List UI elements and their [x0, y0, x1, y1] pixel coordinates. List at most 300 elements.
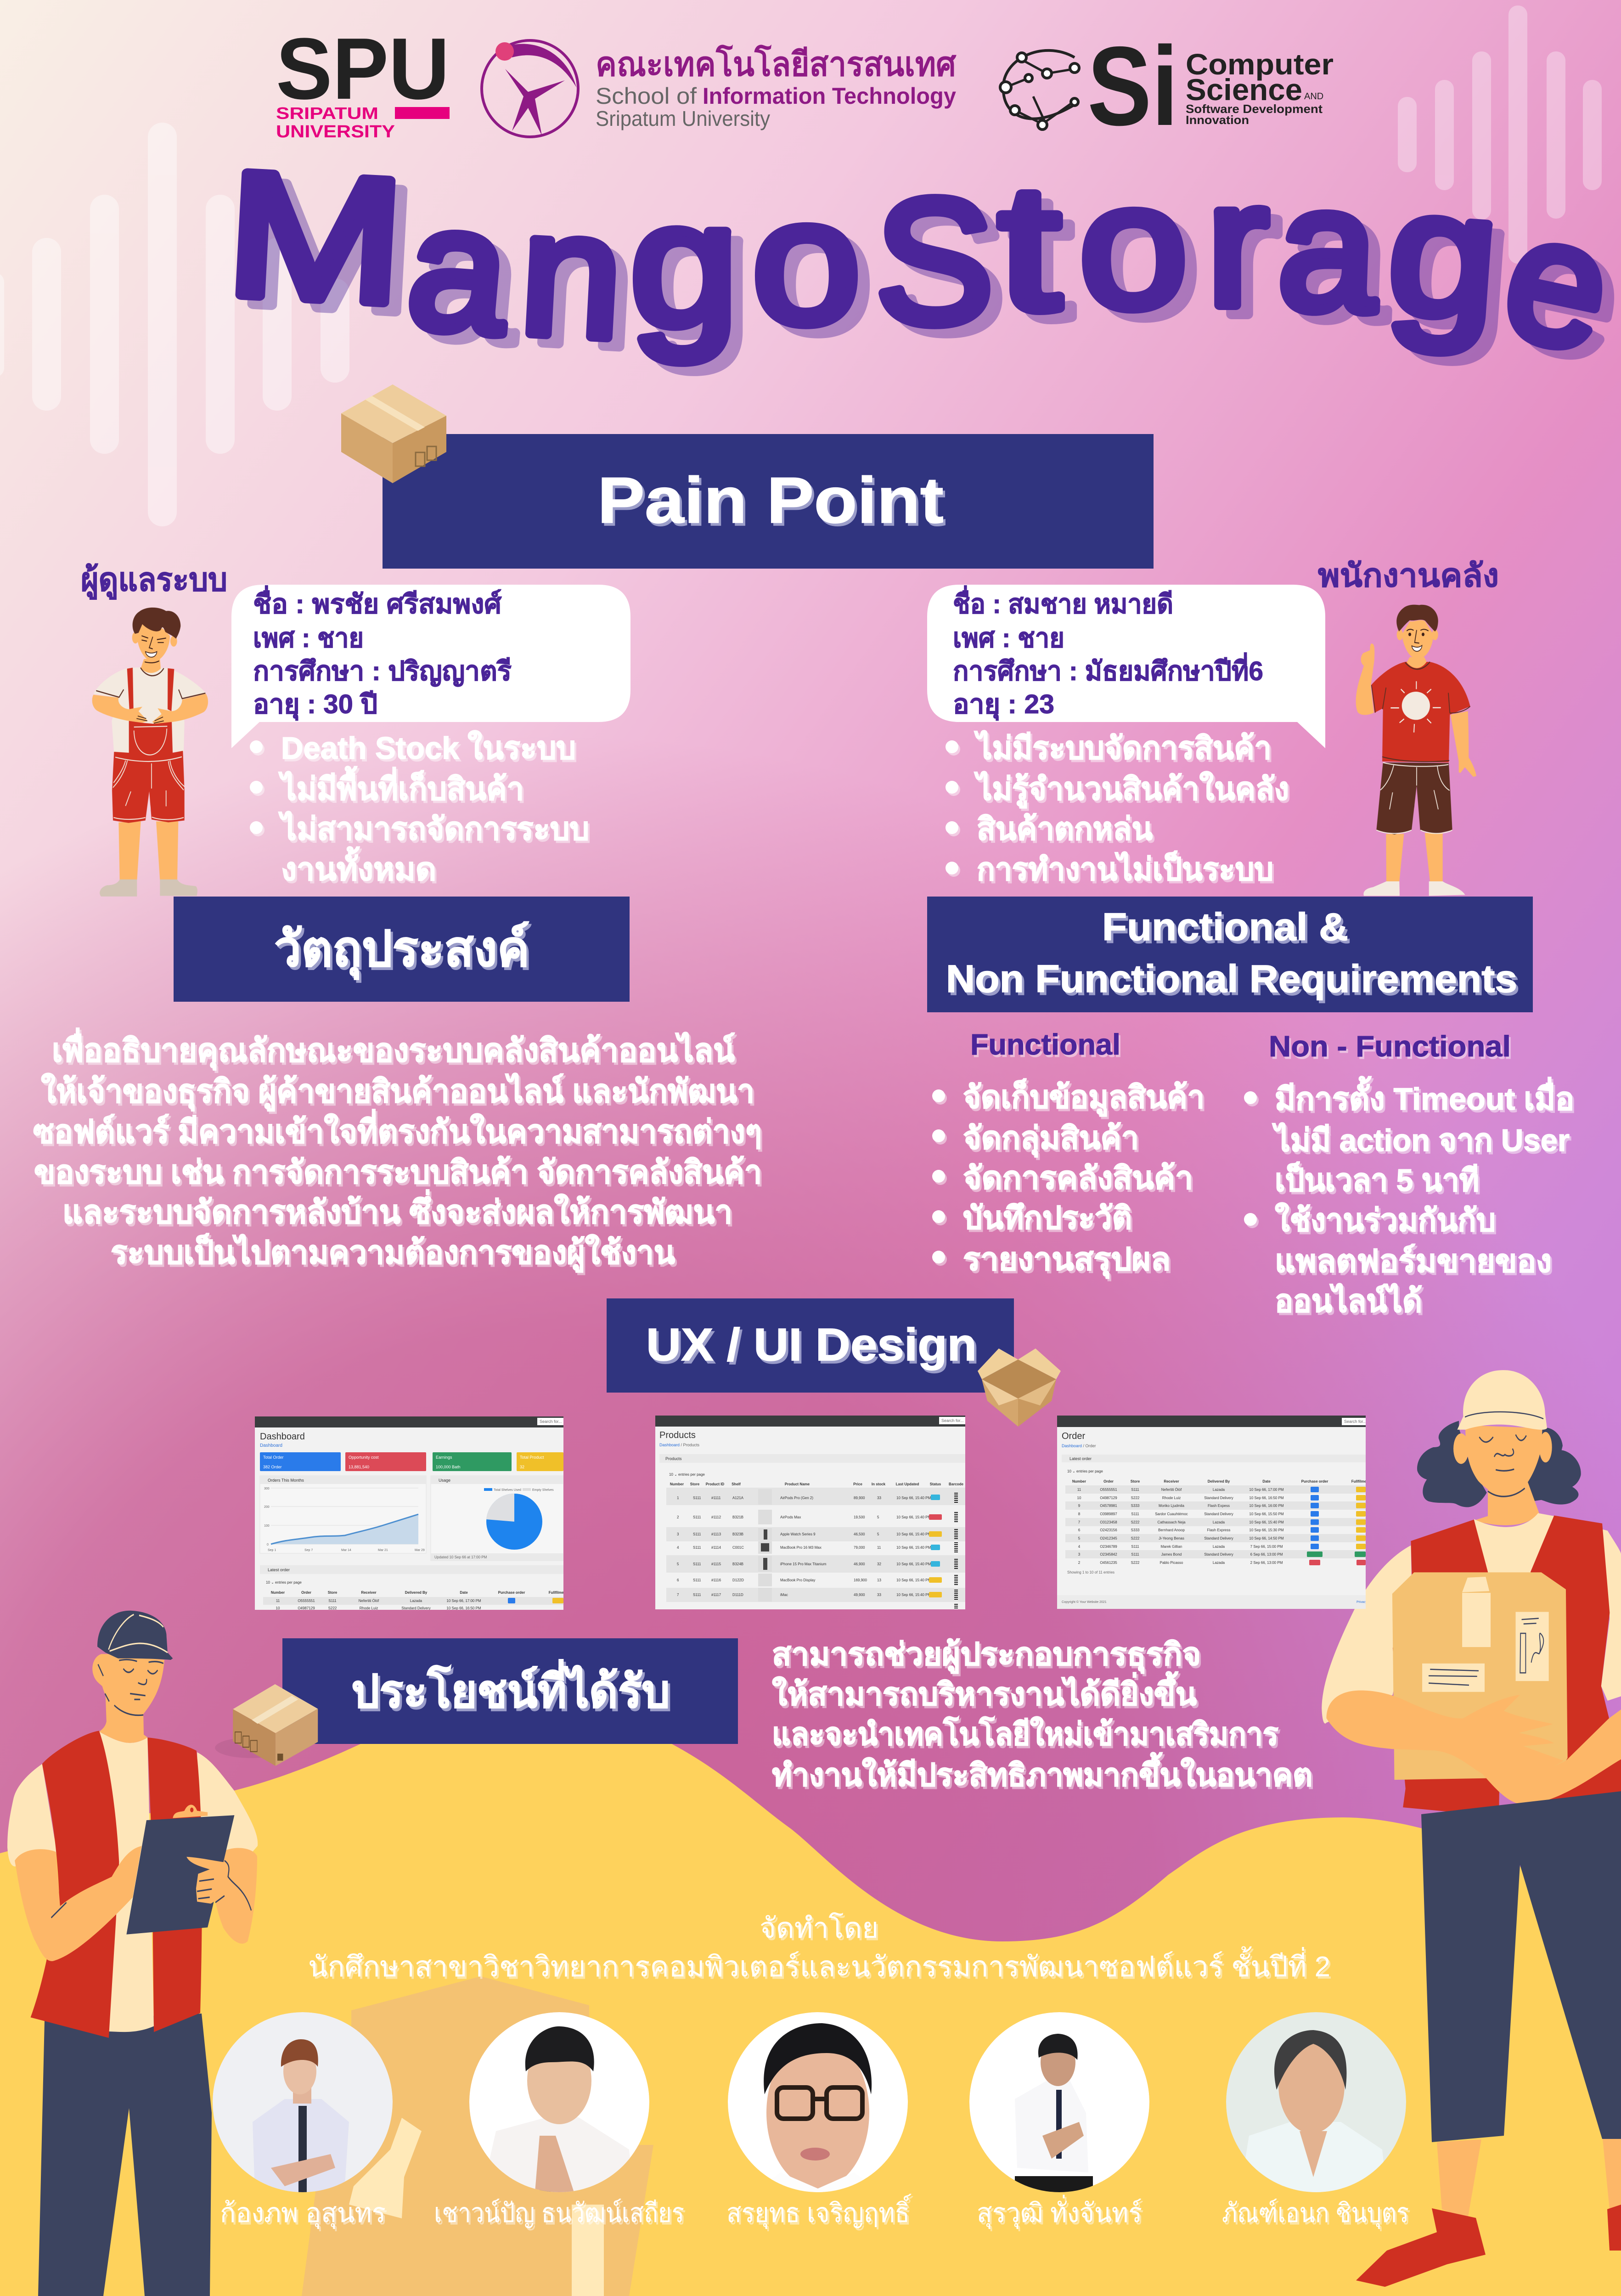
label: system admin: ผู้ดูแลระบบ — [81, 562, 227, 600]
product table: B324B — [732, 1562, 743, 1566]
title: MangoStorage: a — [401, 166, 518, 372]
speech bubble: admin persona: เพศ : ชาย — [253, 623, 364, 653]
speech bubble: admin persona — [231, 585, 630, 748]
order table: 10 Sep 66, 15:30 PM — [1249, 1528, 1284, 1532]
product table: A121A — [732, 1496, 744, 1500]
screenshot: dashboard — [255, 1416, 568, 1610]
product table: 3 — [677, 1532, 679, 1536]
order table: Moriko Ljudmila — [1159, 1504, 1185, 1508]
student names: ก้องภพ อุสุนทร — [220, 2198, 386, 2229]
product table: C001C — [732, 1546, 744, 1550]
product table: S111 — [693, 1532, 701, 1536]
functional requirements list: บันทึกประวัติ — [963, 1201, 1132, 1235]
student names: สุรวุฒิ ทั่งจันทร์ — [977, 2194, 1142, 2229]
order table: 2 — [1078, 1561, 1081, 1565]
product table: 79,000 — [854, 1546, 865, 1550]
order table: 6 — [1078, 1528, 1081, 1532]
logo: SPU: SRIPATUM — [276, 104, 378, 123]
latest orders panel: Store — [328, 1591, 338, 1595]
latest orders panel: Receiver — [361, 1591, 377, 1595]
non-functional requirements list: ใช้งานร่วมกันกับ — [1275, 1202, 1496, 1238]
screenshot: products — [655, 1416, 965, 1609]
order table: O4561235 — [1100, 1561, 1117, 1565]
line chart panel: 0 — [267, 1543, 269, 1546]
order table: James Bond — [1161, 1552, 1182, 1557]
product table: 169,900 — [854, 1578, 867, 1582]
product table: Store — [690, 1482, 700, 1486]
screenshot: orders: 10 ⌄ entries per page — [1067, 1469, 1103, 1473]
logo: CSI: Computer — [1186, 48, 1334, 81]
order table: Fullfilment — [1351, 1479, 1370, 1484]
product table: B321B — [732, 1515, 743, 1519]
benefits paragraph: สามารถช่วยผู้ประกอบการธุรกิจ — [772, 1637, 1201, 1674]
latest orders panel: Latest order — [268, 1568, 290, 1572]
product table: 19,500 — [854, 1515, 865, 1519]
product table: #1112 — [711, 1515, 721, 1519]
product table: Number — [670, 1482, 684, 1486]
order table: O4987129 — [1100, 1496, 1117, 1500]
latest orders panel: Order — [301, 1591, 311, 1595]
product table: 10 Sep 66, 15:40 PM — [896, 1593, 931, 1597]
objectives paragraph — [33, 1027, 762, 1273]
product table: #1114 — [711, 1546, 721, 1550]
line chart panel: 100 — [264, 1524, 270, 1528]
functional requirements list: รายงานสรุปผล — [963, 1242, 1171, 1279]
logo: CSI: Innovation — [1186, 113, 1249, 127]
summary cards: 13,881,540 — [349, 1465, 369, 1469]
product table: #1111 — [711, 1496, 721, 1500]
order table: Standard Delivery — [1204, 1552, 1233, 1557]
benefits paragraph — [772, 1637, 1312, 1793]
decorative sound-wave bars, left — [0, 123, 349, 526]
photo: student 5 — [1226, 2012, 1406, 2192]
speech bubble: warehouse persona: การศึกษา : มัธยมศึกษาปีที่6 — [953, 652, 1263, 686]
functional requirements list — [932, 1078, 1204, 1279]
line chart panel: Sep 1 — [268, 1549, 276, 1552]
order table: S111 — [1131, 1545, 1139, 1549]
pie chart panel — [431, 1476, 563, 1561]
order table: Purchase order — [1301, 1479, 1328, 1484]
order table: O2346789 — [1100, 1545, 1117, 1549]
speech bubble: warehouse persona — [927, 585, 1325, 748]
speech bubble: admin persona: อายุ : 30 ปี — [253, 689, 377, 721]
product table: D122D — [732, 1578, 744, 1582]
pain points list: admin: Death Stock ในระบบ — [281, 730, 576, 766]
product table: AirPods Max — [780, 1515, 801, 1519]
product table: 89,900 — [854, 1496, 865, 1500]
product table: Price — [853, 1482, 862, 1486]
pain points list: warehouse: การทำงานไม่เป็นระบบ — [977, 851, 1273, 887]
product table: 33 — [877, 1593, 881, 1597]
order table: S333 — [1131, 1528, 1140, 1532]
photo: student 1 — [213, 2012, 393, 2193]
line chart panel: Sep 7 — [304, 1549, 313, 1552]
logo: SPU: SPU — [276, 20, 450, 118]
icon: closed box above Pain Point — [341, 384, 446, 483]
order table: Showing 1 to 10 of 11 entries — [1067, 1570, 1114, 1574]
product table: AirPods Pro (Gen 2) — [780, 1496, 813, 1500]
pain points list: admin: ไม่มีพื้นที่เก็บสินค้า — [278, 766, 524, 807]
order table: O3989897 — [1100, 1512, 1117, 1516]
order table: O2345842 — [1100, 1552, 1117, 1557]
non-functional requirements list: แพลตฟอร์มขายของ — [1275, 1244, 1552, 1279]
label: warehouse staff: พนักงานคลัง — [1318, 558, 1499, 593]
product table: 46,500 — [854, 1532, 865, 1536]
order table: O4578981 — [1100, 1504, 1117, 1508]
order table: Receiver — [1164, 1479, 1179, 1484]
product table: S111 — [693, 1515, 701, 1519]
speech bubble: admin persona: ชื่อ : พรชัย ศรีสมพงศ์ — [253, 585, 502, 619]
summary cards: 32 — [520, 1465, 524, 1469]
screenshot: orders: Dashboard / Order — [1062, 1444, 1096, 1448]
speech bubble: warehouse persona: เพศ : ชาย — [953, 623, 1064, 653]
summary cards — [260, 1452, 563, 1471]
logo: CSI: AND — [1304, 91, 1323, 102]
latest orders panel: O5555551 — [298, 1599, 315, 1603]
speech bubble: warehouse persona: ชื่อ : สมชาย หมายดี — [953, 585, 1173, 619]
product table: #1115 — [711, 1562, 721, 1566]
product table: MacBook Pro 16 M3 Max — [780, 1546, 822, 1550]
objectives paragraph: ของระบบ เช่น การจัดการระบบสินค้า จัดการคลังสินค้า — [34, 1154, 762, 1190]
order table: 10 Sep 66, 14:50 PM — [1249, 1536, 1284, 1540]
title: MangoStorage: o — [752, 163, 861, 360]
icon: open box beside UX / UI Design — [978, 1348, 1061, 1427]
product table: Last Updated — [896, 1482, 919, 1486]
title: MangoStorage: n — [516, 173, 627, 375]
order table: Sardor Cuauhtémoc — [1155, 1512, 1188, 1516]
photo: student 2 — [469, 2012, 649, 2195]
non-functional requirements list: ไม่มี action จาก User — [1272, 1122, 1570, 1158]
summary cards: Total Order — [263, 1455, 284, 1460]
screenshot: orders — [1057, 1416, 1370, 1609]
order table: O2423156 — [1100, 1528, 1117, 1532]
pie chart panel: Total Shelves Used — [494, 1489, 521, 1492]
product table: S111 — [693, 1546, 701, 1550]
screenshot: orders: Search for... — [1344, 1419, 1367, 1424]
line chart panel: 300 — [264, 1487, 270, 1490]
order table: Store — [1131, 1479, 1140, 1484]
line chart panel: Orders This Months — [268, 1478, 304, 1483]
line chart panel: Mar 29 — [415, 1549, 425, 1552]
credit: made by: นักศึกษาสาขาวิชาวิทยาการคอมพิวเตอร์และนวัตกรรมการพัฒนาซอฟต์แวร์ ชั้นปีที่ 2 — [308, 1946, 1330, 1983]
title: MangoStorage — [222, 135, 1621, 389]
latest orders panel: Delivered By — [405, 1591, 428, 1595]
order table: S222 — [1131, 1561, 1140, 1565]
credit: made by: จัดทำโดย — [760, 1912, 878, 1944]
order table: Lazada — [1213, 1488, 1225, 1492]
product table: #1116 — [711, 1578, 721, 1582]
heading: functional and non functional requirements: Functional & — [1102, 905, 1348, 948]
order table: S111 — [1131, 1488, 1139, 1492]
order table: 3 — [1078, 1552, 1081, 1557]
order table: Marek Gillian — [1161, 1545, 1182, 1549]
order table — [1057, 1479, 1370, 1609]
order table: 10 Sep 66, 16:50 PM — [1249, 1496, 1284, 1500]
student names: เชาวน์ปัญ ธนวัฒน์เสถียร — [434, 2198, 684, 2228]
order table: S222 — [1131, 1536, 1140, 1540]
screenshot: products: Dashboard / Products — [659, 1443, 700, 1447]
order table: Lazada — [1213, 1561, 1225, 1565]
label: Functional: Functional — [970, 1028, 1120, 1061]
figure: courier trousers, shins and shoes — [1356, 1791, 1621, 2287]
title: MangoStorage: S — [876, 162, 993, 360]
product table: 10 Sep 66, 15:40 PM — [896, 1562, 931, 1566]
product table — [666, 1482, 965, 1609]
latest orders panel — [260, 1565, 568, 1610]
latest orders panel: O4987129 — [298, 1606, 315, 1610]
product table: MacBook Pro Display — [780, 1578, 815, 1582]
latest orders panel: Date — [460, 1591, 468, 1595]
photo: student 3 — [728, 2012, 908, 2192]
pie chart panel: Empty Shelves — [532, 1489, 554, 1492]
non-functional requirements list: เป็นเวลา 5 นาที — [1275, 1162, 1479, 1198]
label: Non - Functional: Non - Functional — [1269, 1030, 1511, 1063]
summary cards: Opportunity cost — [349, 1455, 379, 1460]
order table: Flash Expess — [1208, 1504, 1230, 1508]
logo: CSI — [1000, 23, 1334, 149]
product table: #1113 — [711, 1532, 721, 1536]
product table: Product Name — [785, 1482, 810, 1486]
product table: In stock — [872, 1482, 886, 1486]
line chart panel: Mar 21 — [378, 1549, 388, 1552]
latest orders panel: S111 — [328, 1599, 337, 1603]
order table: Number — [1072, 1479, 1086, 1484]
order table: 10 — [1077, 1496, 1081, 1500]
pain points list: warehouse — [946, 730, 1289, 887]
student names: สรยุทธ เจริญฤทธิ์ — [726, 2194, 912, 2229]
latest orders panel: 11 — [276, 1599, 280, 1603]
speech bubble: admin persona: การศึกษา : ปริญญาตรี — [253, 656, 512, 687]
screenshot: products: 10 ⌄ entries per page — [669, 1472, 705, 1477]
non-functional requirements list: ออนไลน์ได้ — [1275, 1283, 1422, 1319]
product table: iPhone 15 Pro Max Titanium — [780, 1562, 827, 1566]
order table: 5 — [1078, 1536, 1081, 1540]
latest orders panel: 10 ⌄ entries per page — [266, 1580, 302, 1585]
product table: 10 Sep 66, 15:40 PM — [896, 1515, 931, 1519]
product table: S111 — [693, 1578, 701, 1582]
order table: S222 — [1131, 1520, 1140, 1524]
heading: benefits — [282, 1638, 738, 1744]
product table: #1117 — [711, 1593, 721, 1597]
heading: objectives — [174, 897, 630, 1002]
icon: flat box near benefits heading — [215, 1684, 318, 1766]
title: MangoStorage: g — [1383, 152, 1504, 357]
product table: Apple Watch Series 9 — [780, 1532, 816, 1536]
logo: SPU: UNIVERSITY — [276, 122, 395, 141]
product table: Barcode — [949, 1482, 964, 1486]
order table: 2 Sep 66, 13:00 PM — [1250, 1561, 1283, 1565]
order table: 11 — [1077, 1488, 1081, 1492]
product table: 5 — [877, 1515, 879, 1519]
order table: Date — [1262, 1479, 1271, 1484]
heading: functional and non functional requirements: Non Functional Requirements — [946, 957, 1517, 1000]
speech bubble: warehouse persona: อายุ : 23 — [953, 689, 1054, 721]
order table: Privacy — [1356, 1601, 1367, 1604]
order table: Rhode Luiz — [1162, 1496, 1181, 1500]
order table: S111 — [1131, 1512, 1139, 1516]
pain points list: admin: งานทั้งหมด — [281, 846, 436, 887]
latest orders panel: Rhode Luiz — [360, 1606, 378, 1610]
functional requirements list: จัดเก็บข้อมูลสินค้า — [963, 1078, 1204, 1117]
logo: CSI: Software Development — [1186, 102, 1323, 116]
latest orders panel: 10 — [276, 1606, 280, 1610]
product table: Product ID — [706, 1482, 724, 1486]
product table: 49,900 — [854, 1593, 865, 1597]
order table: 10 Sep 66, 15:50 PM — [1249, 1512, 1284, 1516]
photo: student 4 — [969, 2012, 1149, 2194]
heading: benefits: ประโยชน์ที่ได้รับ — [351, 1659, 670, 1717]
student names: ภัณฑ์เอนก ชินบุตร — [1222, 2198, 1409, 2229]
objectives paragraph: ซอฟต์แวร์ มีความเข้าใจที่ตรงกันในความสามารถต่างๆ — [33, 1109, 762, 1150]
title: MangoStorage: r — [1207, 145, 1268, 343]
product table: 11 — [877, 1546, 881, 1550]
line chart panel: 200 — [264, 1506, 270, 1509]
figure: admin boy — [92, 608, 208, 897]
order table: 6 Sep 66, 13:00 PM — [1250, 1552, 1283, 1557]
screenshot: orders: Order — [1062, 1431, 1085, 1441]
screenshot: products: Products — [665, 1456, 682, 1461]
product table: 5 — [877, 1532, 879, 1536]
product table: 4 — [677, 1546, 679, 1550]
pie chart panel: Updated 10 Sep 66 at 17:00 PM — [434, 1555, 487, 1559]
order table: O5555551 — [1100, 1488, 1117, 1492]
logo: School of Information Technology — [482, 40, 957, 137]
order table: O2412345 — [1100, 1536, 1117, 1540]
line chart panel: Mar 14 — [341, 1549, 351, 1552]
benefits paragraph: ให้สามารถบริหารงานได้ดียิ่งขึ้น — [772, 1671, 1197, 1712]
product table: 10 Sep 66, 15:40 PM — [896, 1532, 931, 1536]
order table: Copyright © Your Website 2021 — [1062, 1600, 1107, 1604]
product table: 1 — [677, 1496, 679, 1500]
benefits paragraph: ทำงานให้มีประสิทธิภาพมากขึ้นในอนาคต — [772, 1752, 1312, 1793]
product table: Status — [930, 1482, 941, 1486]
pain points list: warehouse: สินค้าตกหล่น — [977, 812, 1153, 846]
pain points list: warehouse: ไม่รู้จำนวนสินค้าในคลัง — [974, 771, 1289, 809]
order table: Ji-Yeong Benas — [1159, 1536, 1184, 1540]
logo: School of Information Technology: Information Technology — [703, 83, 956, 109]
latest orders panel: Purchase order — [498, 1591, 525, 1595]
figure: warehouse boy — [1356, 605, 1476, 896]
order table: 10 Sep 66, 16:00 PM — [1249, 1504, 1284, 1508]
non-functional requirements list: มีการตั้ง Timeout เมื่อ — [1275, 1076, 1574, 1117]
latest orders panel: 10 Sep 66, 16:50 PM — [446, 1606, 481, 1610]
latest orders panel: 10 Sep 66, 17:00 PM — [446, 1599, 481, 1603]
order table: Pablo Picasso — [1160, 1561, 1183, 1565]
latest orders panel: Lazada — [410, 1599, 422, 1603]
screenshot: orders: Latest order — [1069, 1456, 1092, 1461]
student names — [220, 2194, 1409, 2229]
order table: Standard Delivery — [1204, 1512, 1233, 1516]
objectives paragraph: ให้เจ้าของธุรกิจ ผู้ค้าขายสินค้าออนไลน์ และนักพัฒนา — [41, 1072, 754, 1111]
product table: 32 — [877, 1562, 881, 1566]
product table: 5 — [677, 1562, 679, 1566]
order table: 8 — [1078, 1512, 1081, 1516]
screenshot: products: Products — [659, 1430, 696, 1440]
title: MangoStorage: o — [1077, 146, 1189, 345]
benefits paragraph: และจะนำเทคโนโลยีใหม่เข้ามาเสริมการ — [772, 1716, 1278, 1752]
product table: 10 Sep 66, 15:40 PM — [896, 1496, 931, 1500]
heading: Pain Point — [383, 434, 1154, 569]
order table: Lazada — [1213, 1520, 1225, 1524]
title: MangoStorage: a — [1275, 147, 1382, 349]
screenshot: dashboard: Dashboard — [260, 1443, 282, 1448]
order table: Delivered By — [1208, 1479, 1230, 1484]
product table: B323B — [732, 1532, 743, 1536]
summary cards: 100,000 Bath — [436, 1465, 461, 1469]
order table: Nefertiti Ólóf — [1161, 1488, 1182, 1492]
product table: 13 — [877, 1578, 881, 1582]
title: MangoStorage: M — [222, 135, 409, 341]
product table: S111 — [693, 1562, 701, 1566]
objectives paragraph: เพื่ออธิบายคุณลักษณะของระบบคลังสินค้าออนไลน์ — [52, 1027, 735, 1071]
order table: S111 — [1131, 1552, 1139, 1557]
heading: functional and non functional requirements — [927, 897, 1533, 1012]
yellow wave — [0, 1711, 1621, 2296]
order table: 7 — [1078, 1520, 1081, 1524]
title: MangoStorage: t — [999, 149, 1061, 346]
screenshot: dashboard: Search for... — [540, 1419, 562, 1424]
screenshot: dashboard: Dashboard — [260, 1432, 305, 1442]
pain points list: admin — [250, 730, 589, 887]
latest orders panel: Fullfilment — [549, 1591, 568, 1595]
heading: UX / UI Design: UX / UI Design — [646, 1319, 977, 1371]
product table: 33 — [877, 1496, 881, 1500]
logo: CSI: Si — [1087, 23, 1178, 149]
title: MangoStorage: g — [630, 165, 738, 364]
order table: S333 — [1131, 1504, 1140, 1508]
order table: S222 — [1131, 1496, 1140, 1500]
order table: Cathassach Neja — [1158, 1520, 1186, 1524]
latest orders panel: Standard Delivery — [401, 1606, 431, 1610]
order table: 10 Sep 66, 17:00 PM — [1249, 1488, 1284, 1492]
heading: Pain Point: Pain Point — [597, 464, 944, 537]
faded parcel on wave — [302, 1976, 653, 2296]
credit: made by — [308, 1912, 1330, 1983]
objectives paragraph: ระบบเป็นไปตามความต้องการของผู้ใช้งาน — [111, 1233, 675, 1273]
summary cards: Total Product — [520, 1455, 544, 1460]
product table: D111D — [732, 1593, 743, 1597]
product table: 6 — [677, 1578, 679, 1582]
summary cards: 382 Order — [263, 1465, 282, 1469]
line chart panel — [260, 1476, 426, 1553]
logo: School of Information Technology: คณะเทคโนโลยีสารสนเทศ — [596, 44, 957, 83]
order table: O3123458 — [1100, 1520, 1117, 1524]
product table: iMac — [780, 1593, 788, 1597]
product table: 7 — [677, 1593, 679, 1597]
order table: Standard Delivery — [1204, 1496, 1233, 1500]
latest orders panel: S222 — [328, 1606, 337, 1610]
figure: worker with clipboard — [7, 1611, 258, 2038]
order table: 4 — [1078, 1545, 1081, 1549]
product table: S111 — [693, 1496, 701, 1500]
screenshot: products: Search for... — [941, 1418, 964, 1423]
logo: School of Information Technology: School of — [596, 83, 697, 109]
order table: 7 Sep 66, 15:00 PM — [1250, 1545, 1283, 1549]
heading: UX / UI Design — [607, 1298, 1014, 1393]
order table: Standard Delivery — [1204, 1536, 1233, 1540]
pain points list: admin: ไม่สามารถจัดการระบบ — [278, 811, 589, 846]
objectives paragraph: และระบบจัดการหลังบ้าน ซึ่งจะส่งผลให้การพัฒนา — [62, 1189, 732, 1230]
logo: School of Information Technology: Sripatum University — [596, 107, 770, 130]
decorative sound-wave bars, right — [1398, 6, 1602, 264]
functional requirements list: จัดการคลังสินค้า — [963, 1161, 1193, 1196]
order table: Flash Express — [1207, 1528, 1230, 1532]
functional requirements list: จัดกลุ่มสินค้า — [963, 1121, 1139, 1157]
summary cards: Earnings — [436, 1455, 452, 1460]
order table: 10 Sep 66, 15:40 PM — [1249, 1520, 1284, 1524]
order table: Bernhard Anoop — [1158, 1528, 1185, 1532]
product table: Shelf — [732, 1482, 741, 1486]
